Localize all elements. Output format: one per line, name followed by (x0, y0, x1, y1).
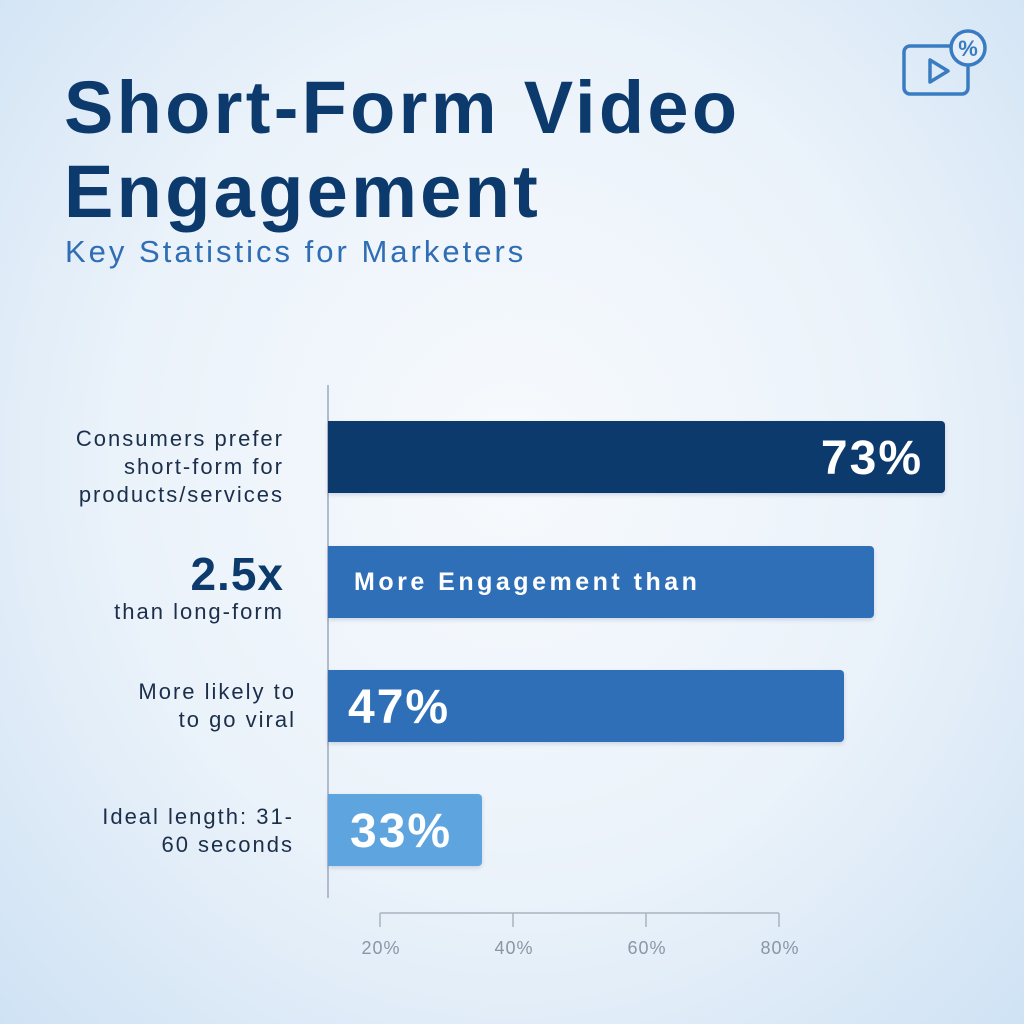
label 4: 60 seconds (161, 832, 294, 857)
label 2: than long-form (114, 599, 284, 624)
label 3 (138, 679, 296, 732)
label 3: to go viral (179, 707, 296, 732)
subtitle: Key Statistics for Marketers (65, 234, 526, 269)
title (64, 66, 740, 233)
bar 2: More Engagement than (354, 568, 700, 596)
x axis: 20% (361, 938, 401, 958)
label 2 (114, 548, 284, 624)
bar 4 (328, 794, 482, 866)
x axis: 80% (760, 938, 800, 958)
x axis: 60% (627, 938, 667, 958)
label 4: Ideal length: 31- (102, 804, 294, 829)
label 3: More likely to (138, 679, 296, 704)
label 4 (102, 804, 294, 857)
bar 3 (328, 670, 844, 742)
icon: video percent (902, 29, 987, 96)
label 1: Consumers prefer (76, 426, 284, 451)
bar 2 (328, 546, 874, 618)
label 1 (76, 426, 284, 507)
vertical axis (327, 385, 328, 898)
x axis: 40% (494, 938, 534, 958)
title: Short-Form Video (64, 66, 740, 149)
chart (327, 385, 329, 898)
title: Engagement (64, 150, 541, 233)
bar 3: 47% (348, 681, 450, 734)
bar 1 (328, 421, 945, 493)
label 2: 2.5x (190, 548, 284, 600)
label 1: products/services (79, 482, 284, 507)
bar 1: 73% (821, 432, 923, 485)
x axis (361, 912, 800, 958)
icon: video percent: % (958, 36, 978, 61)
bar 4: 33% (350, 805, 452, 858)
label 1: short-form for (124, 454, 284, 479)
